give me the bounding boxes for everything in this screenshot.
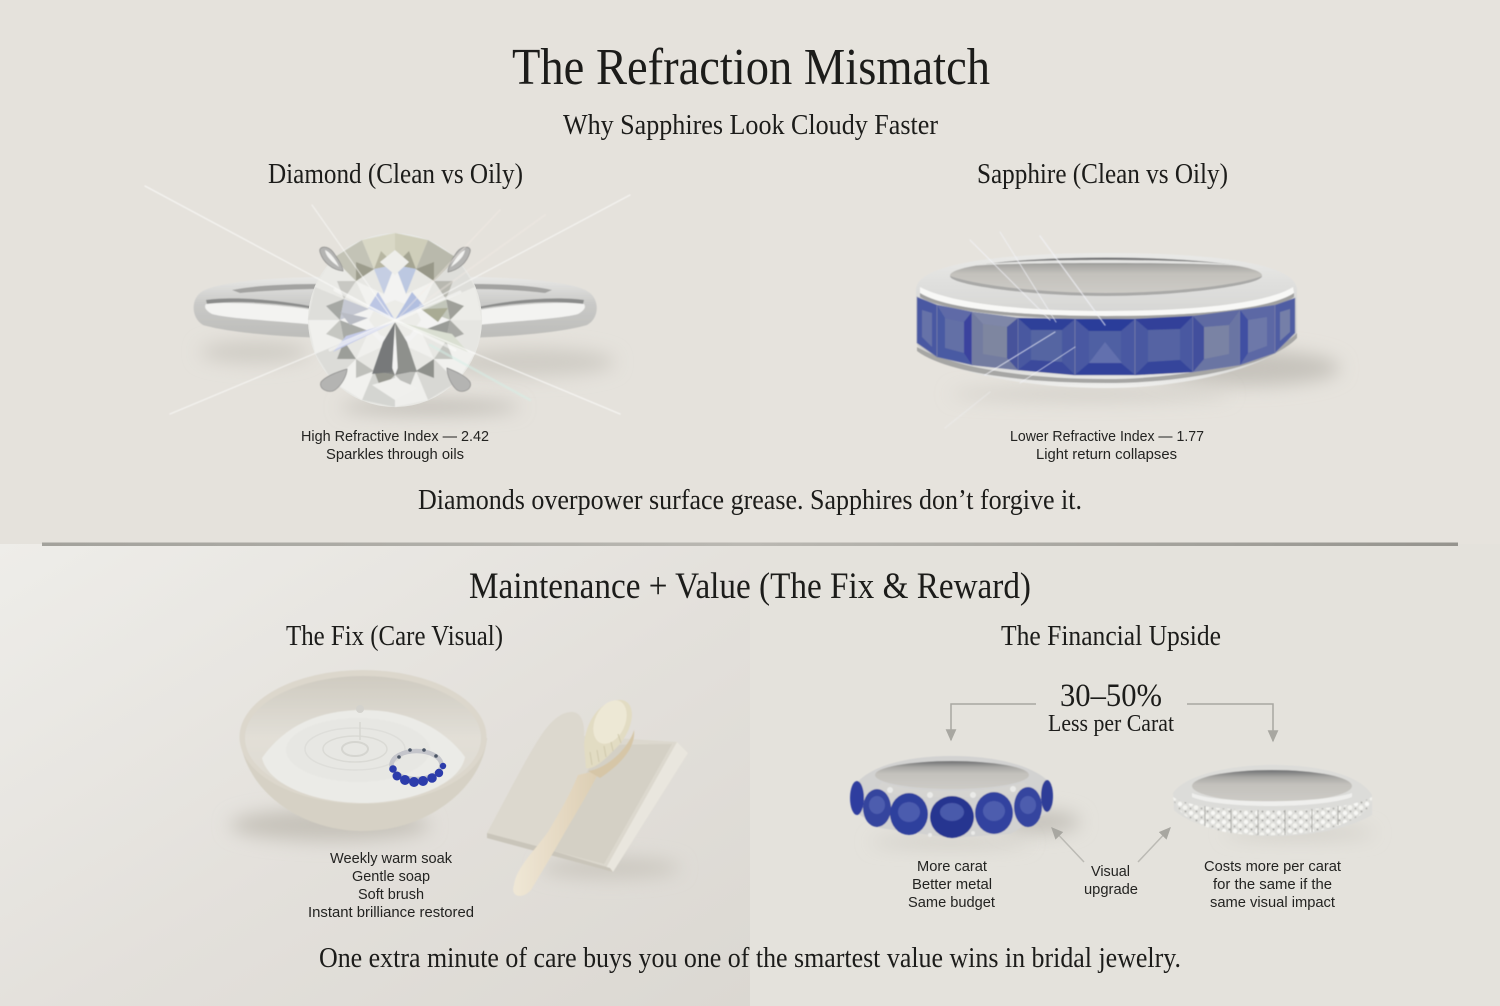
- caption: diamond cost: for the same if the: [1213, 877, 1332, 893]
- caption: sapphire value: Same budget: [908, 895, 995, 911]
- caption: sapphire value: More carat: [917, 859, 987, 875]
- caption: diamond: High Refractive Index — 2.42: [301, 429, 489, 445]
- caption: diamond: [301, 429, 489, 463]
- caption: sapphire value: [908, 859, 995, 911]
- stones: channel-set squares: [917, 297, 1295, 375]
- caption: sapphire: Lower Refractive Index — 1.77: [1010, 429, 1204, 445]
- caption: diamond cost: same visual impact: [1210, 895, 1335, 911]
- caption: care steps: Weekly warm soak: [330, 851, 453, 867]
- caption: diamond: Sparkles through oils: [326, 447, 464, 463]
- icon: prongs: [320, 247, 471, 391]
- icon: light rays: [145, 186, 630, 414]
- stat: 30-50 percent: 30–50%: [1060, 678, 1162, 714]
- caption: care steps: Soft brush: [358, 887, 424, 903]
- arrow: visual upgrade to diamond ring: [1138, 828, 1170, 862]
- heading: financial upside: The Financial Upside: [1001, 621, 1221, 652]
- icon: small sapphire ring in bowl: [389, 748, 446, 787]
- caption: visual upgrade: upgrade: [1084, 882, 1138, 898]
- icon: sapphire five-stone ring: [850, 756, 1080, 846]
- heading: the fix: The Fix (Care Visual): [286, 621, 503, 652]
- diamond facets: [308, 233, 482, 407]
- caption: visual upgrade: [1084, 864, 1138, 898]
- caption: care steps: Instant brilliance restored: [308, 905, 474, 921]
- icon: sapphire light rays: [945, 232, 1105, 428]
- heading: sapphire: Sapphire (Clean vs Oily): [977, 158, 1228, 190]
- caption: care steps: Gentle soap: [352, 869, 430, 885]
- caption: sapphire: Light return collapses: [1036, 447, 1177, 463]
- caption: diamond cost: [1204, 859, 1341, 911]
- caption: care steps: [308, 851, 474, 921]
- icon: wooden brush: [513, 695, 634, 896]
- caption: sapphire value: Better metal: [912, 877, 992, 893]
- takeaway: bottom section: One extra minute of care buys you one of the smartest value wins in bridal jewelry.: [319, 943, 1181, 974]
- caption: diamond cost: Costs more per carat: [1204, 859, 1341, 875]
- caption: visual upgrade: Visual: [1091, 864, 1130, 880]
- arrow: stat to diamond ring: [1187, 704, 1273, 741]
- icon: ceramic bowl with water: [230, 670, 487, 841]
- heading: maintenance and value: Maintenance + Value (The Fix & Reward): [469, 566, 1031, 607]
- title: The Refraction Mismatch: [512, 39, 990, 96]
- icon: diamond pave ring: [1173, 765, 1375, 838]
- icon: sapphire channel band: [916, 232, 1340, 428]
- icon: diamond solitaire ring: [145, 186, 630, 414]
- arrow: stat to sapphire ring: [951, 704, 1036, 740]
- takeaway: top section: Diamonds overpower surface grease. Sapphires don’t forgive it.: [418, 485, 1082, 516]
- icon: folded cloth: [487, 712, 688, 878]
- subtitle: Why Sapphires Look Cloudy Faster: [563, 109, 938, 141]
- stat label: Less per Carat: [1048, 711, 1174, 737]
- heading: diamond: Diamond (Clean vs Oily): [268, 158, 523, 190]
- arrow: visual upgrade to sapphire ring: [1052, 828, 1084, 862]
- caption: sapphire: [1010, 429, 1204, 463]
